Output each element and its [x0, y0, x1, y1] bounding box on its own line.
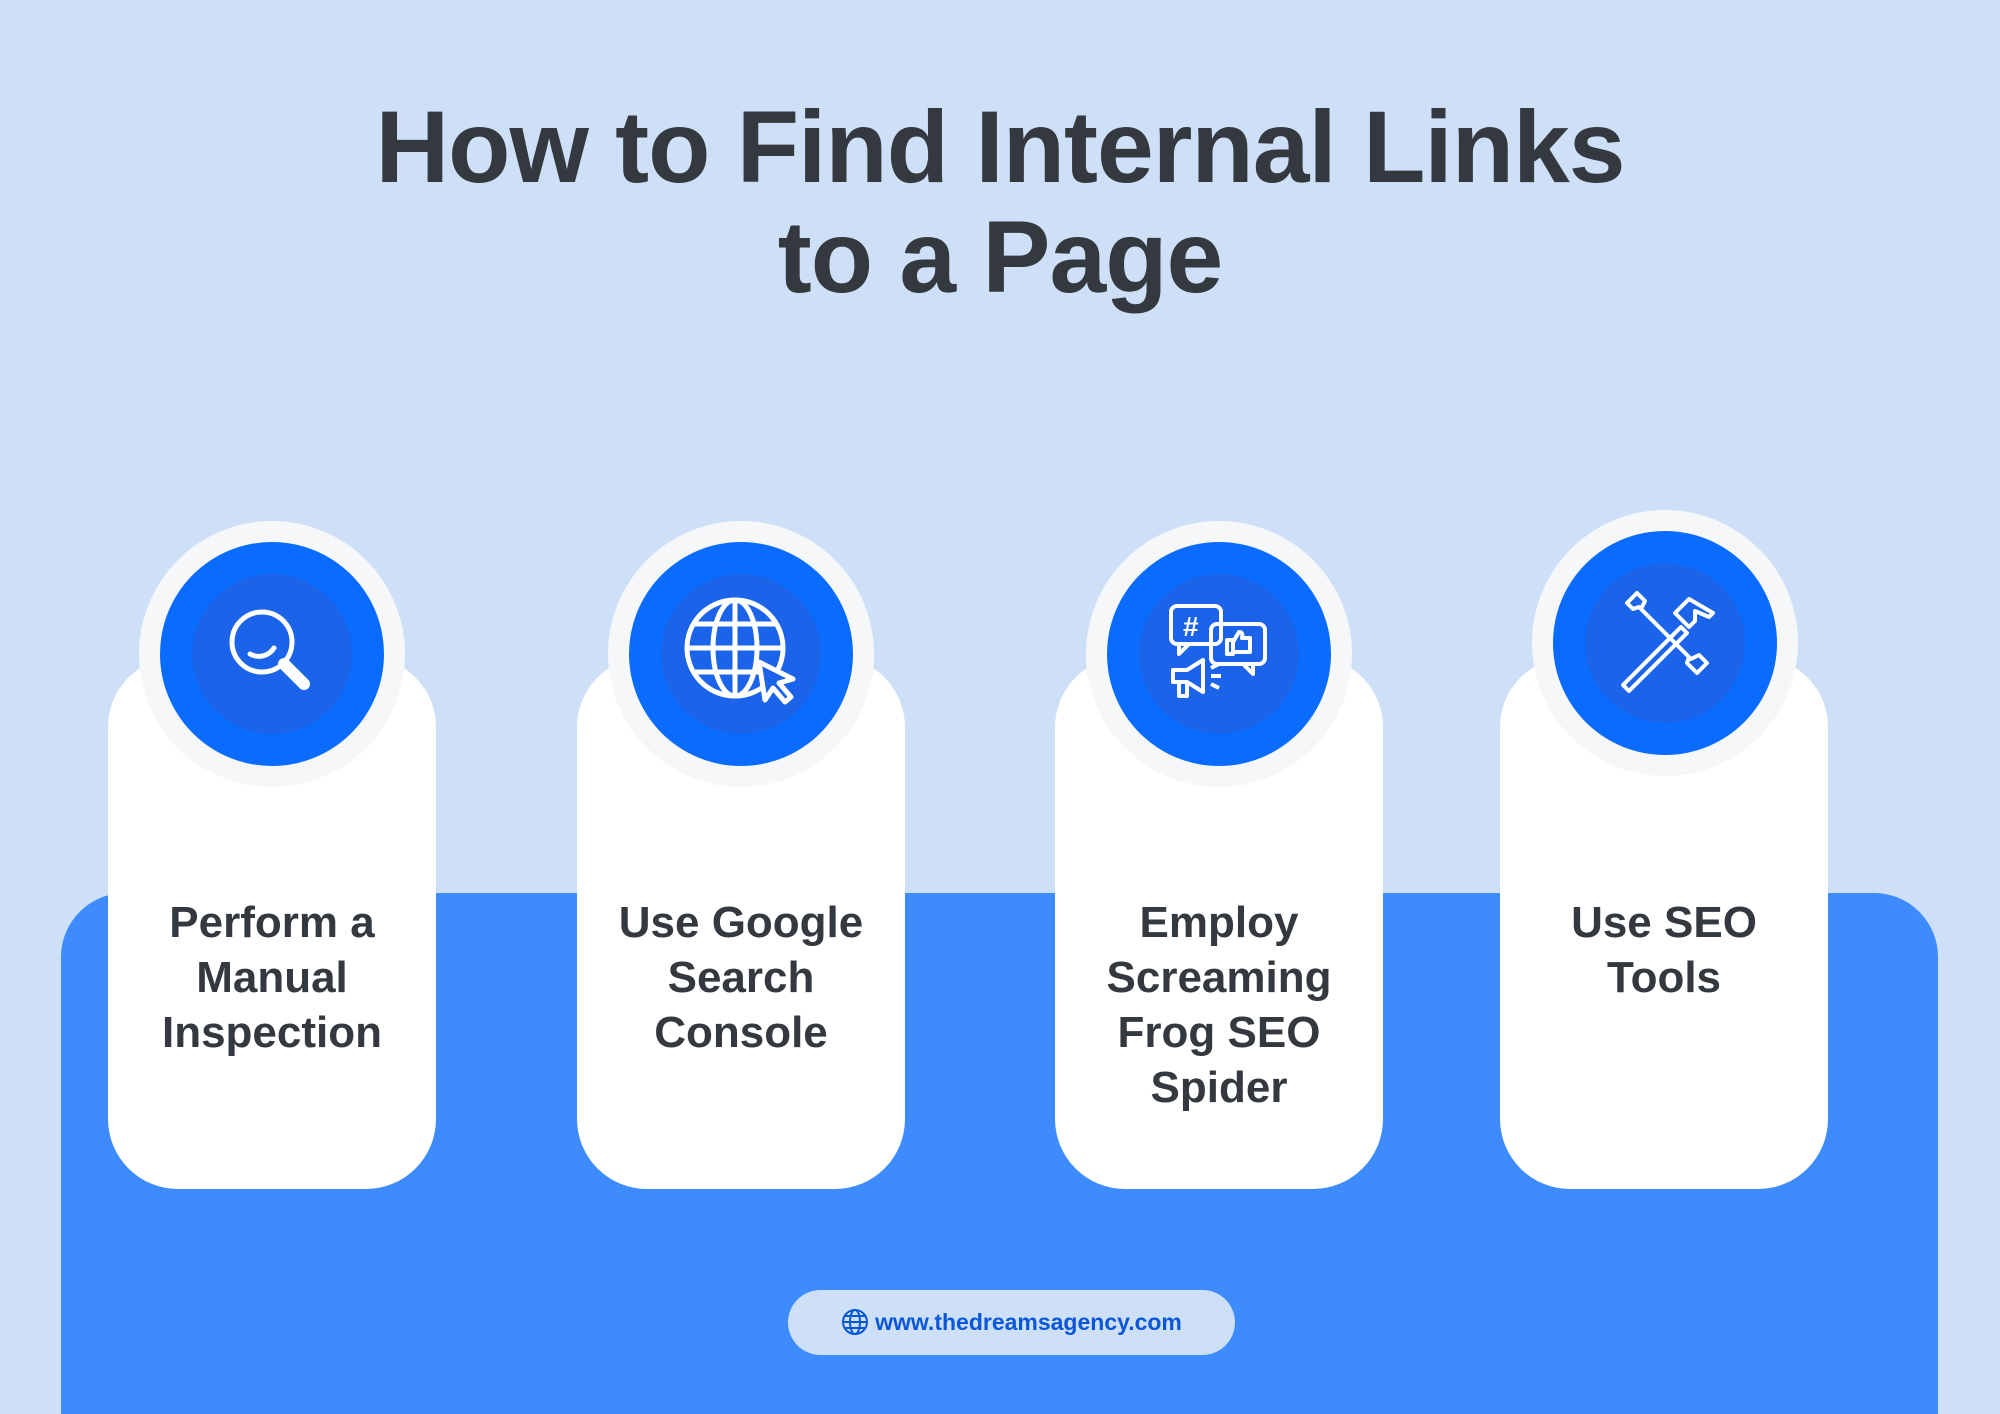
card 3: screaming frog — [1055, 657, 1383, 1189]
label — [1571, 898, 1757, 1002]
label: Perform a — [169, 898, 375, 947]
card 4: seo tools — [1500, 657, 1828, 1189]
label: Use SEO — [1571, 898, 1757, 947]
label: Inspection — [162, 1008, 382, 1057]
label: Console — [654, 1008, 828, 1057]
label: Employ — [1140, 898, 1298, 947]
label: Screaming — [1106, 953, 1331, 1002]
icon: social chat: # — [1183, 611, 1199, 642]
label: Frog SEO — [1118, 1008, 1320, 1057]
blue bottom panel — [61, 893, 1938, 1414]
icon: social chat — [1086, 521, 1352, 787]
label: Spider — [1151, 1063, 1287, 1112]
footer url pill — [788, 1290, 1235, 1355]
card 2: google search console — [577, 657, 905, 1189]
title: How to Find Internal Links — [376, 90, 1624, 204]
label — [162, 898, 382, 1057]
label — [1106, 898, 1331, 1112]
label: Search — [668, 953, 814, 1002]
label: Tools — [1607, 953, 1721, 1002]
card 1: manual inspection — [108, 657, 436, 1189]
label: Manual — [196, 953, 348, 1002]
title — [376, 90, 1624, 314]
footer url pill: www.thedreamsagency.com — [875, 1309, 1182, 1335]
label: Use Google — [619, 898, 863, 947]
icon: magnifier — [139, 521, 405, 787]
icon: tools — [1532, 510, 1798, 776]
label — [619, 898, 863, 1057]
title: to a Page — [778, 200, 1222, 314]
icon: globe cursor — [608, 521, 874, 787]
